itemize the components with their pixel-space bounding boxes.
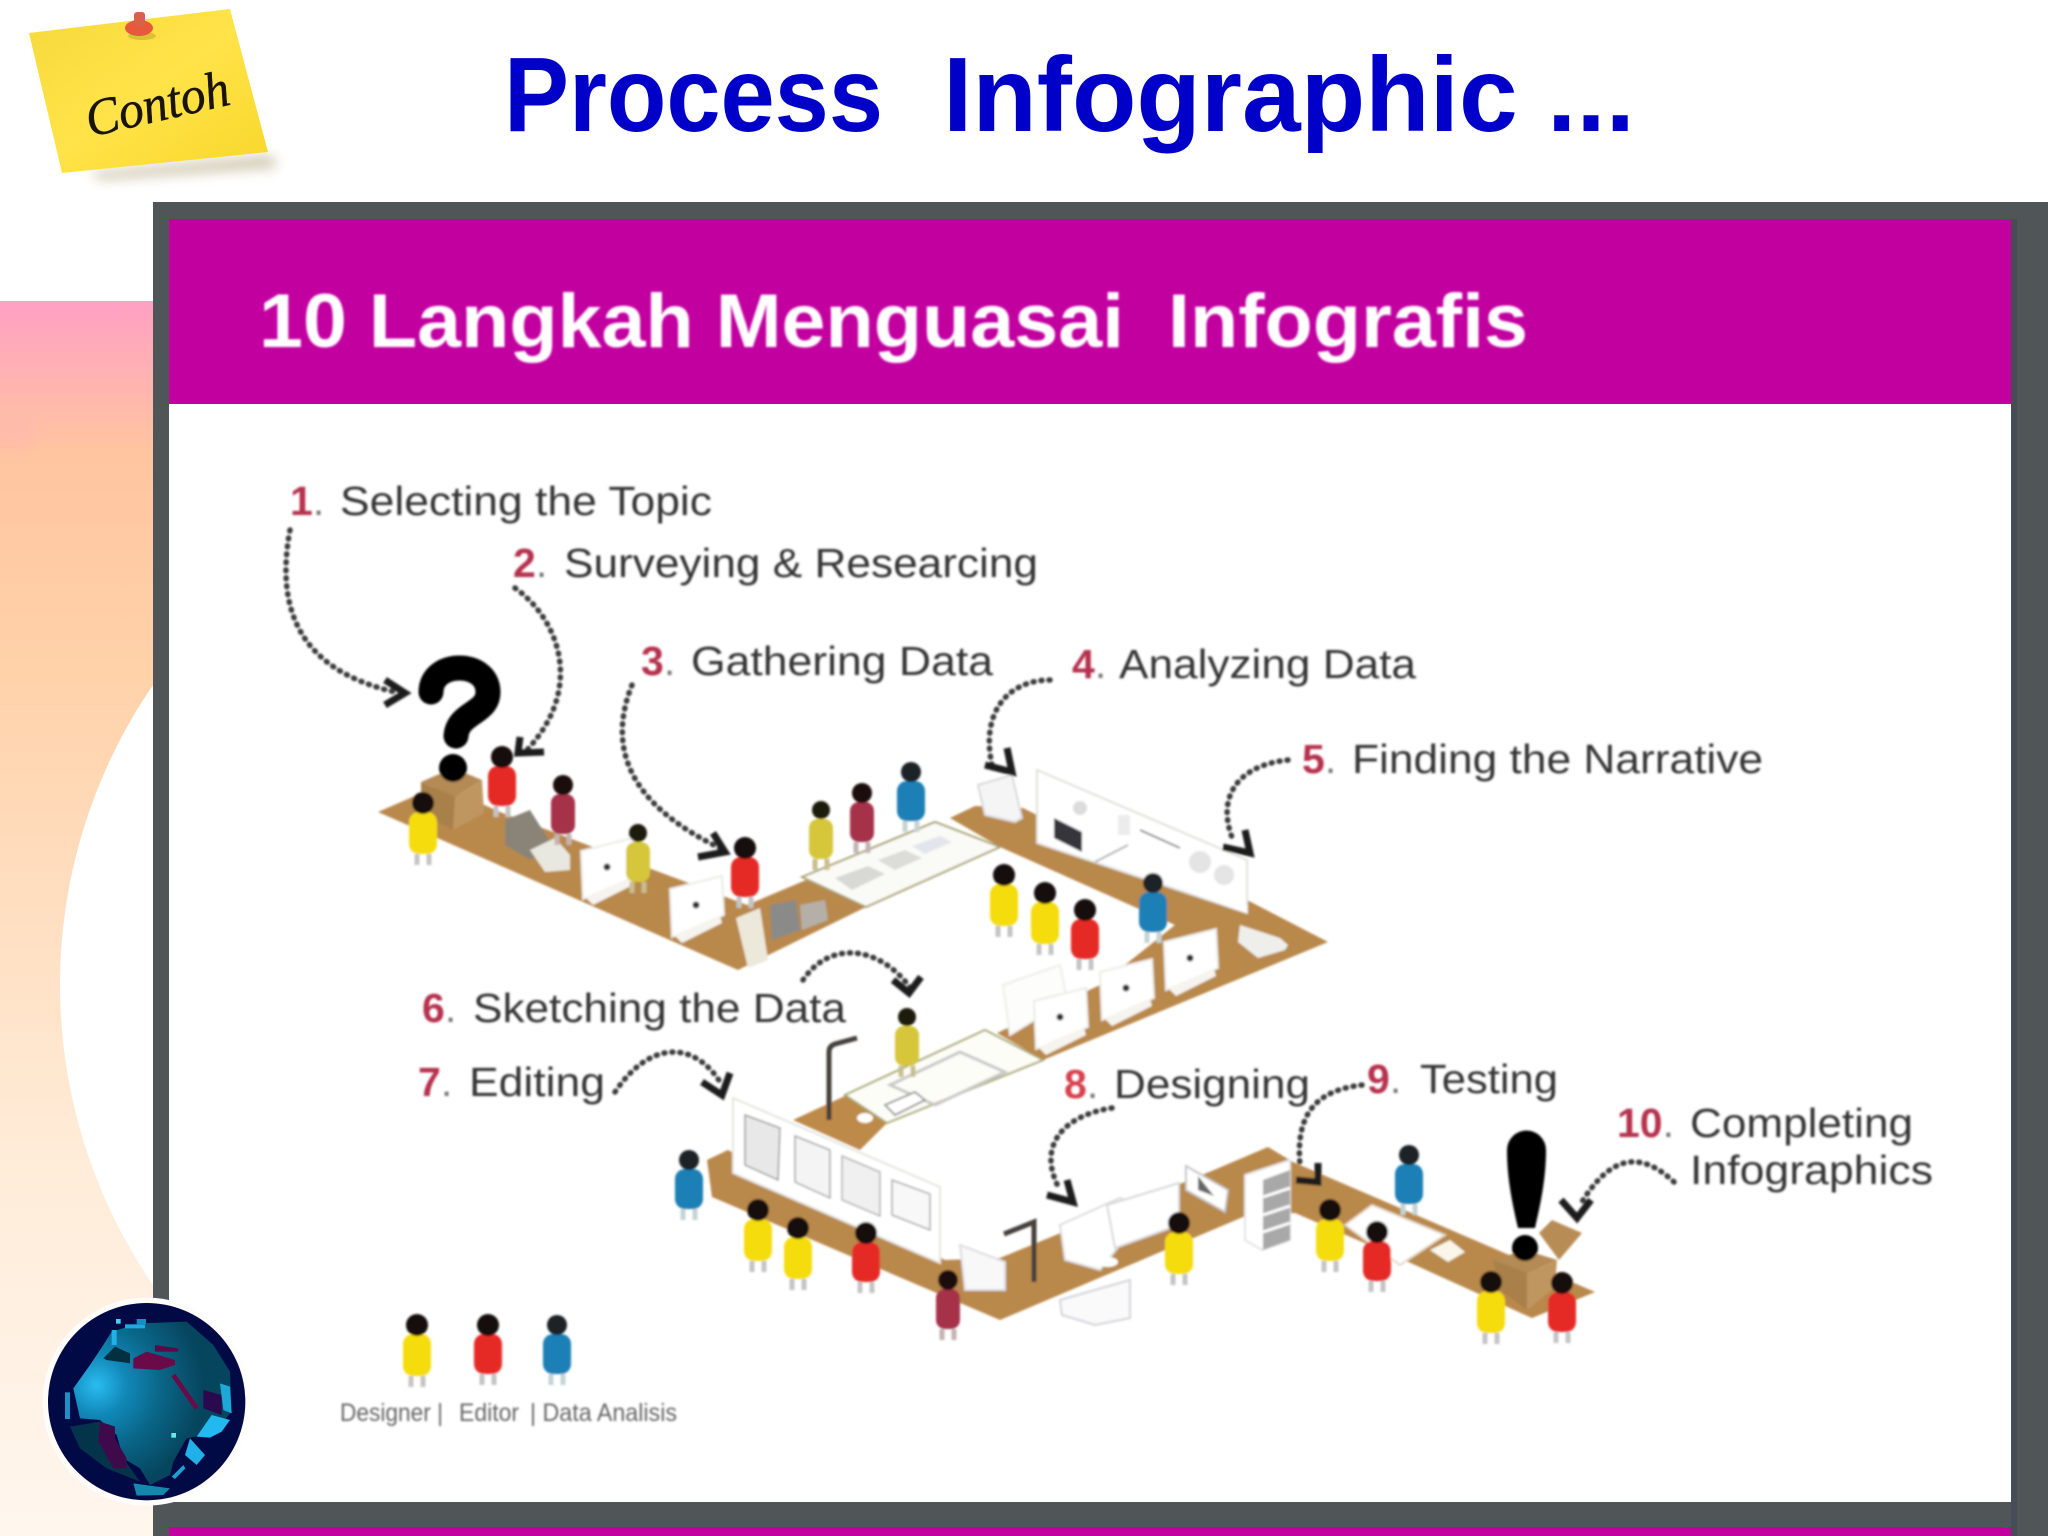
- step labels: [290, 478, 1933, 1193]
- step 4 label: 4.: [1072, 641, 1106, 687]
- step 8 name: Designing: [1114, 1061, 1310, 1107]
- step 4 name: Analyzing Data: [1119, 641, 1416, 687]
- note text: Contoh: [80, 60, 235, 149]
- monitor: editing desk: [960, 1245, 1005, 1290]
- icon: globe: [43, 1298, 251, 1506]
- step 10 name: Completing: [1690, 1100, 1913, 1146]
- title: [504, 36, 1635, 154]
- step 7 label: 7.: [418, 1059, 452, 1105]
- bookshelf: [1245, 1160, 1290, 1250]
- lamp: designing: [1004, 1222, 1034, 1282]
- legend text: Editor: [459, 1399, 519, 1427]
- whiteboard: narrative: [1037, 770, 1247, 913]
- header band: [169, 219, 2011, 404]
- step 6 name: Sketching the Data: [473, 985, 846, 1031]
- dotted arrows: [286, 530, 1674, 1218]
- people: row 2: [895, 864, 1167, 1077]
- box with question mark: [421, 668, 488, 830]
- step 5 label: 5.: [1302, 736, 1336, 782]
- cabinet: analyzing: [978, 775, 1022, 822]
- step 10 label: 10.: [1617, 1100, 1674, 1146]
- step 9 label: 9.: [1367, 1056, 1401, 1102]
- question mark: [431, 668, 488, 736]
- step 1 name: Selecting the Topic: [340, 478, 712, 524]
- floor: right strip: [950, 806, 1328, 1060]
- floor: upper strip: [378, 785, 866, 970]
- drawing desk: designing: [1060, 1166, 1228, 1270]
- paper tray: testing: [1430, 1240, 1465, 1262]
- equipment: stacked paper and printers: [505, 810, 828, 968]
- step 2 label: 2.: [513, 540, 547, 586]
- step 1 label: 1.: [290, 478, 324, 524]
- step 5 name: Finding the Narrative: [1352, 736, 1763, 782]
- legend text: | Data Analisis: [530, 1399, 677, 1427]
- white block behind monitors: [1003, 965, 1067, 1035]
- monitors: [581, 838, 1218, 1055]
- heading: 10 Langkah Menguasai Infografis: [259, 279, 1528, 364]
- step 7 name: Editing: [469, 1059, 605, 1105]
- icon: push pin: [125, 12, 153, 36]
- table: sketching: [829, 1030, 1043, 1123]
- floor: lower strip: [707, 1147, 1595, 1320]
- table: testing: [1345, 1205, 1445, 1265]
- step 2 name: Surveying & Researcing: [564, 540, 1038, 586]
- legend text: [340, 1399, 677, 1427]
- box with exclamation mark: [1493, 1130, 1582, 1310]
- table: gathering data: [802, 822, 1000, 907]
- printer: narrative: [1238, 925, 1288, 958]
- people: row 4: [1165, 1145, 1576, 1344]
- legend figures: [403, 1314, 571, 1387]
- legend text: Designer |: [340, 1399, 443, 1427]
- step 3 label: 3.: [641, 638, 675, 684]
- step 6 label: 6.: [422, 985, 456, 1031]
- step 9 name: Testing: [1420, 1056, 1558, 1102]
- whiteboard: editing: [733, 1098, 940, 1263]
- title: Process: [504, 36, 883, 154]
- bottom band: [169, 1527, 2011, 1536]
- exclamation mark: [1507, 1130, 1546, 1228]
- people: row 3: [675, 1150, 960, 1340]
- illustration: isometric workflow: [286, 530, 1674, 1344]
- filing drawers: [1060, 1280, 1130, 1325]
- step 10 name, second line: Infographics: [1690, 1147, 1933, 1193]
- step 8 label: 8.: [1064, 1061, 1098, 1107]
- legend: [340, 1314, 677, 1427]
- floor: sketching patch: [793, 1095, 887, 1150]
- people: row 1: [409, 746, 925, 908]
- step 3 name: Gathering Data: [691, 638, 993, 684]
- sticky note: Contoh: [29, 9, 276, 180]
- left background band: [0, 301, 1120, 1536]
- title: Infographic ...: [943, 36, 1635, 154]
